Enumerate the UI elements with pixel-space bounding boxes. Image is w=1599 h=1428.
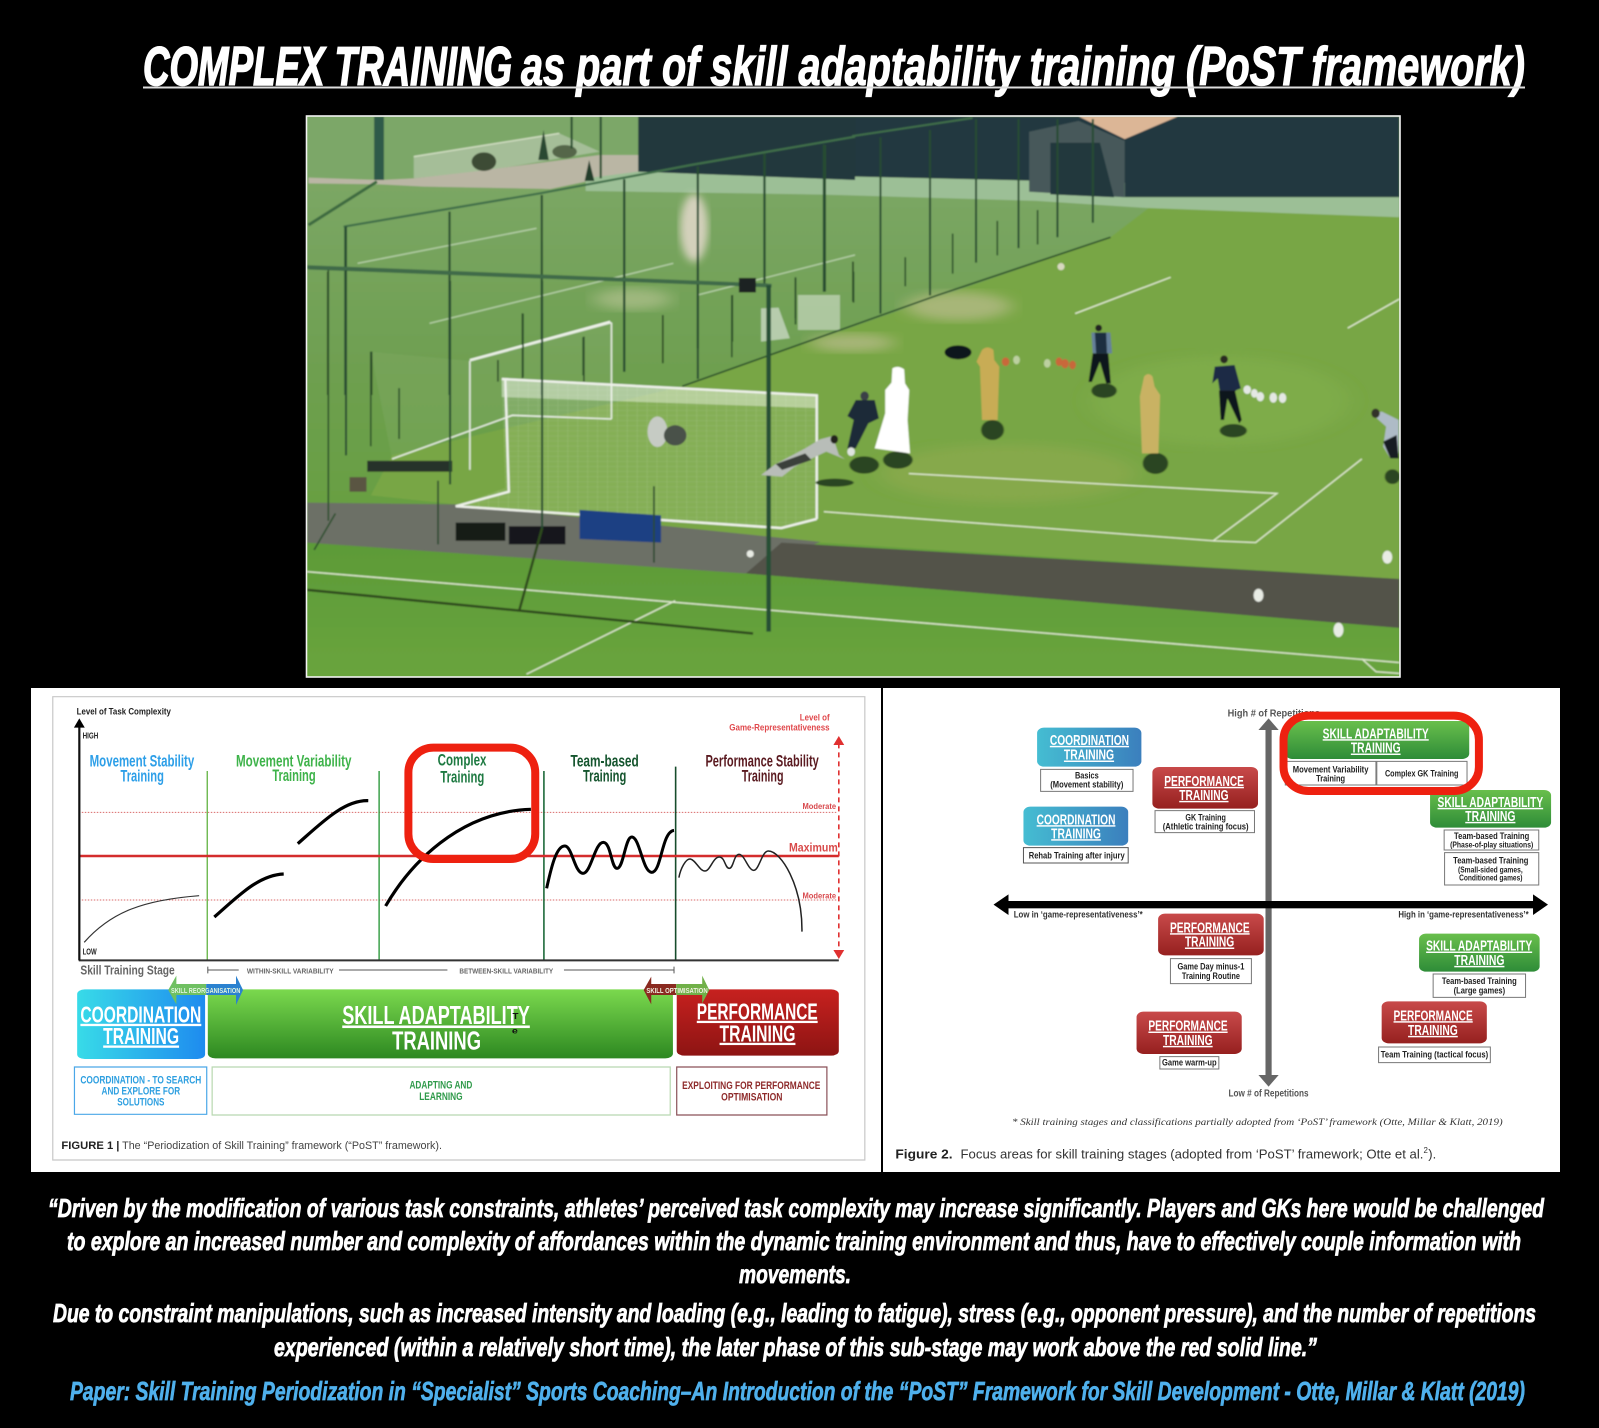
panel: figure 1 PoST framework: COORDINATION bbox=[80, 1001, 201, 1028]
label: adapting and learning: ADAPTING AND bbox=[409, 1079, 472, 1091]
block: performance GK training: PERFORMANCE bbox=[1164, 772, 1244, 789]
block: skill adaptability complex GK: Complex GK Training bbox=[1385, 769, 1458, 779]
block: performance GK training bbox=[1152, 767, 1258, 833]
chart: task complexity curves: Team-based bbox=[570, 752, 639, 770]
chart: task complexity curves: Training bbox=[272, 766, 316, 785]
block: coordination basics bbox=[1037, 728, 1141, 791]
photo: goalkeepers training on pitch bbox=[300, 110, 1410, 680]
block: skill adaptability team-based: (Small-sided games, bbox=[1458, 866, 1523, 874]
block: skill adaptability team-based: Conditioned games) bbox=[1459, 874, 1522, 882]
block: performance GK training: TRAINING bbox=[1179, 786, 1229, 803]
block: performance GK training: (Athletic training focus) bbox=[1163, 822, 1249, 832]
chart: task complexity curves: Level of bbox=[800, 712, 830, 723]
skill training stage axis: BETWEEN-SKILL VARIABILITY bbox=[459, 967, 553, 976]
skill adaptability training block: TRAINING bbox=[392, 1026, 481, 1055]
block: skill adaptability team-based: Team-based Training bbox=[1454, 831, 1529, 842]
chart: task complexity curves: Training bbox=[121, 767, 164, 785]
label: adapting and learning: LEARNING bbox=[419, 1091, 463, 1103]
chart: task complexity curves: HIGH bbox=[83, 732, 98, 741]
block: performance game day minus-1: Training Routine bbox=[1182, 971, 1240, 982]
arrow: skill optimisation: SKILL OPTIMISATION bbox=[646, 987, 708, 995]
block: skill adaptability team-based: TRAINING bbox=[1465, 807, 1515, 824]
label: coordination purpose: COORDINATION - TO SEARCH bbox=[80, 1074, 201, 1086]
caption: figure 2: 2 bbox=[1423, 1146, 1428, 1155]
panel: figure 2 focus areas bbox=[883, 688, 1560, 1172]
block: skill adaptability large games: TRAINING bbox=[1454, 951, 1504, 968]
glare on lens bbox=[680, 194, 708, 262]
block: skill adaptability large games: Team-based Training bbox=[1442, 976, 1517, 987]
chart: task complexity curves: Complex bbox=[438, 751, 487, 769]
skill adaptability training block: SKILL ADAPTABILITY bbox=[342, 1001, 530, 1030]
chart: task complexity curves: Movement Variability bbox=[236, 752, 352, 770]
label: adapting and learning bbox=[212, 1067, 670, 1115]
caption: figure 1: The “Periodization of Skill Training” framework (“PoST” framework). bbox=[122, 1140, 442, 1152]
label: coordination purpose: SOLUTIONS bbox=[117, 1097, 165, 1109]
block: coordination basics: TRAINING bbox=[1064, 746, 1114, 763]
axis: repetitions: High # of Repetitions bbox=[1228, 708, 1320, 719]
panel: figure 1 PoST framework: Performance Stability bbox=[705, 752, 819, 770]
label: exploiting for performance: EXPLOITING FOR PERFORMANCE bbox=[682, 1080, 821, 1092]
block: skill adaptability large games: (Large games) bbox=[1454, 986, 1505, 996]
caption: figure 2 bbox=[895, 1146, 1436, 1162]
block: skill adaptability team-based: (Phase-of-play situations) bbox=[1450, 841, 1533, 849]
block: skill adaptability team-based: Team-based Training bbox=[1453, 856, 1528, 866]
performance training block bbox=[677, 989, 839, 1056]
coordination training block: TRAINING bbox=[103, 1023, 179, 1049]
block: skill adaptability complex GK: TRAINING bbox=[1351, 739, 1401, 756]
block: skill adaptability complex GK: SKILL ADAPTABILITY bbox=[1323, 725, 1429, 742]
footnote: * Skill training stages and classifications partially adopted from ‘PoST’ framework (Otte, Millar & Klatt, 2019) bbox=[1012, 1117, 1503, 1128]
arrow: skill optimisation bbox=[644, 976, 709, 1004]
chart: task complexity curves: Maximum bbox=[789, 841, 838, 855]
chart: task complexity curves: Training bbox=[583, 767, 626, 785]
caption: figure 2: Figure 2. bbox=[895, 1148, 953, 1162]
quote text bbox=[48, 1193, 1545, 1362]
axis: game representativeness: Low in ‘game-representativeness’* bbox=[1014, 910, 1143, 920]
label: coordination purpose bbox=[74, 1067, 207, 1114]
block: performance team training bbox=[1379, 1001, 1490, 1063]
label: exploiting for performance: OPTIMISATION bbox=[721, 1092, 782, 1104]
block: performance GK training: GK Training bbox=[1185, 813, 1226, 823]
panel: figure 1 PoST framework: SKILL REORGANISATION bbox=[171, 987, 240, 995]
block: performance game day minus-1: PERFORMANCE bbox=[1170, 919, 1250, 936]
panel: figure 1 PoST framework: PERFORMANCE bbox=[697, 999, 818, 1025]
quote text: movements. bbox=[739, 1259, 851, 1289]
block: coordination rehab: Rehab Training after injury bbox=[1029, 851, 1125, 861]
red highlight: complex training bbox=[408, 748, 535, 859]
block: performance team training: Team Training (tactical focus) bbox=[1381, 1050, 1488, 1060]
block: performance game warm-up: TRAINING bbox=[1163, 1031, 1213, 1048]
skill adaptability training block: T bbox=[512, 1012, 519, 1021]
block: coordination basics: COORDINATION bbox=[1050, 731, 1129, 748]
red highlight: skill adaptability bbox=[1284, 716, 1479, 791]
caption: figure 2: Focus areas for skill training stages (adopted from ‘PoST’ framework; Otte et al. bbox=[961, 1148, 1423, 1162]
block: skill adaptability complex GK bbox=[1285, 721, 1469, 785]
chart: task complexity curves: Training bbox=[742, 767, 784, 785]
block: coordination basics: Basics bbox=[1075, 771, 1099, 781]
chart: task complexity curves: Training bbox=[440, 768, 484, 786]
players, mannequins and balls bbox=[761, 325, 1400, 487]
caption: figure 1: FIGURE 1 | bbox=[61, 1140, 119, 1152]
label: coordination purpose: AND EXPLORE FOR bbox=[102, 1085, 181, 1097]
title: COMPLEX TRAINING bbox=[143, 35, 512, 97]
block: coordination rehab: COORDINATION bbox=[1037, 811, 1115, 828]
performance training block: TRAINING bbox=[720, 1021, 795, 1047]
block: performance game day minus-1: Game Day minus-1 bbox=[1177, 962, 1244, 972]
axis: repetitions: Low # of Repetitions bbox=[1229, 1088, 1309, 1099]
arrow: skill reorganisation bbox=[168, 976, 243, 1005]
chart: task complexity curves: Movement Stability bbox=[90, 752, 195, 770]
block: performance game day minus-1 bbox=[1158, 914, 1264, 984]
skill training stage axis bbox=[80, 963, 674, 977]
goals and foreground fence bbox=[307, 118, 1392, 637]
block: skill adaptability complex GK: Movement Variability bbox=[1293, 765, 1369, 775]
caption: figure 2: ). bbox=[1428, 1148, 1436, 1162]
block: skill adaptability complex GK: Training bbox=[1316, 774, 1345, 784]
photo border bbox=[306, 116, 1400, 677]
block: performance team training: PERFORMANCE bbox=[1394, 1007, 1473, 1024]
block: performance game warm-up: PERFORMANCE bbox=[1148, 1017, 1228, 1034]
block: coordination rehab: TRAINING bbox=[1051, 825, 1101, 842]
axis: game representativeness bbox=[994, 894, 1548, 920]
block: performance game day minus-1: TRAINING bbox=[1185, 933, 1234, 950]
block: performance game warm-up bbox=[1137, 1012, 1242, 1069]
chart: task complexity curves: Moderate bbox=[802, 892, 836, 901]
coordination training block bbox=[77, 989, 205, 1059]
block: skill adaptability large games bbox=[1419, 934, 1540, 997]
skill training stage axis: WITHIN-SKILL VARIABILITY bbox=[247, 967, 334, 976]
axis: repetitions bbox=[1228, 708, 1320, 1099]
background: buildings, path and back fence bbox=[305, 115, 855, 395]
chart: task complexity curves: LOW bbox=[83, 948, 97, 957]
block: skill adaptability team-based bbox=[1430, 790, 1551, 885]
chart: task complexity curves: Moderate bbox=[802, 802, 836, 811]
axis: game representativeness: High in ‘game-representativeness’* bbox=[1398, 910, 1529, 920]
block: coordination basics: (Movement stability) bbox=[1050, 780, 1123, 790]
block: performance team training: TRAINING bbox=[1408, 1021, 1458, 1038]
panel: figure 1 PoST framework bbox=[31, 688, 881, 1172]
caption: figure 1 bbox=[61, 1140, 442, 1152]
block: coordination rehab bbox=[1023, 807, 1128, 863]
skill adaptability training block bbox=[208, 989, 673, 1058]
label: exploiting for performance bbox=[677, 1067, 827, 1115]
skill training stage axis: Skill Training Stage bbox=[80, 963, 175, 977]
title bbox=[143, 35, 1525, 97]
chart: task complexity curves: Level of Task Complexity bbox=[77, 706, 171, 717]
chart: task complexity curves bbox=[74, 706, 844, 960]
skill adaptability training block: e bbox=[512, 1026, 518, 1036]
block: performance game warm-up: Game warm-up bbox=[1162, 1058, 1217, 1068]
chart: task complexity curves: Game-Representativeness bbox=[729, 722, 830, 733]
